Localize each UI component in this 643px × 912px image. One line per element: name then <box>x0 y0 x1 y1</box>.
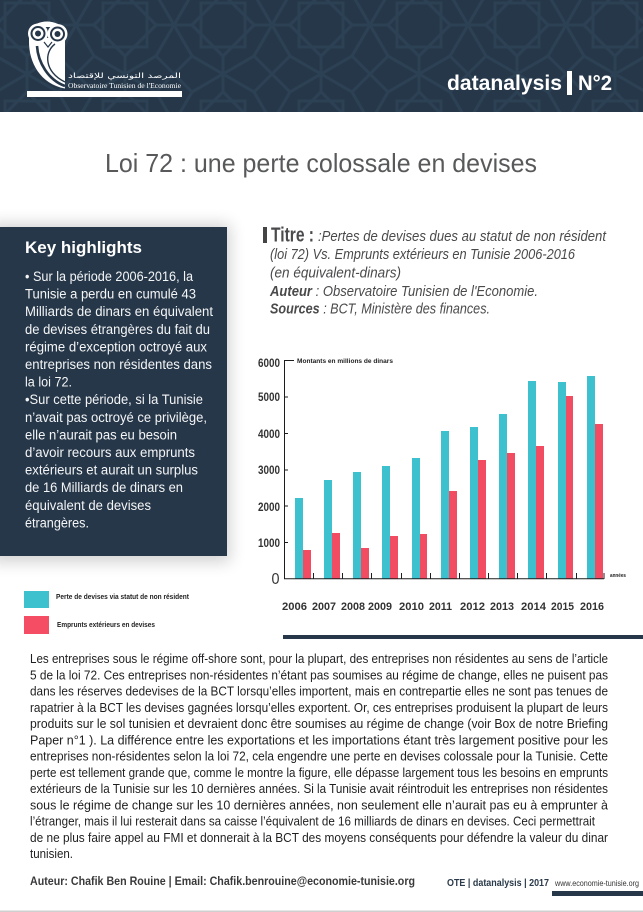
legend <box>24 591 190 634</box>
body text <box>30 651 609 861</box>
key highlights text: Milliards de dinars en équivalent <box>25 304 213 319</box>
y axis labels: 2000 <box>258 502 280 514</box>
chart description: (loi 72) Vs. Emprunts extérieurs en Tunisie 2006-2016 <box>270 247 576 263</box>
x axis labels: 2013 <box>490 601 514 613</box>
key highlights text: d’avoir recours aux emprunts <box>25 445 195 460</box>
legend item: emprunts: Emprunts extérieurs en devises <box>57 622 155 629</box>
title: Loi 72 : une perte colossale en devises <box>105 148 537 178</box>
key highlights text: équivalent de devises <box>25 498 151 513</box>
y axis labels: 1000 <box>258 538 280 550</box>
chart description: Auteur : Observatoire Tunisien de l'Economie. <box>269 284 538 300</box>
logo underline bar <box>27 91 182 97</box>
footer author and email: Auteur: Chafik Ben Rouine | Email: Chafik.benrouine@economie-tunisie.org <box>30 876 415 888</box>
header label: datanalysis <box>447 72 562 95</box>
x axis labels: 2014 <box>521 601 547 613</box>
header label: N°2 <box>578 72 612 95</box>
header label <box>447 71 612 95</box>
body text: produits sur le sol tunisien et devraient donc être soumises au régime de change (voir Box de notre Briefing <box>30 716 608 731</box>
footer accent bar <box>552 891 643 896</box>
key highlights text: extérieurs et aurait un surplus <box>25 463 198 478</box>
chart description: (en équivalent-dinars) <box>270 266 401 282</box>
x axis labels: 2015 <box>551 601 574 613</box>
y axis labels: 6000 <box>258 358 280 370</box>
x axis labels: 2016 <box>580 601 604 613</box>
y axis title: Montants en millions de dinars <box>297 358 393 365</box>
key highlights text: régime d’exception octroyé aux <box>25 339 207 354</box>
icon: owl logo <box>28 22 68 88</box>
y axis labels <box>258 358 280 588</box>
chart description: Sources : BCT, Ministère des finances. <box>270 302 490 318</box>
x axis labels: 2010 <box>399 601 424 613</box>
key highlights text: de 16 Milliards de dinars en <box>25 480 183 495</box>
footer bottom line <box>0 910 643 912</box>
legend item: emprunts <box>24 616 155 634</box>
x axis labels: 2006 <box>282 601 307 613</box>
legend item: perte de devises <box>24 591 190 608</box>
panel: key highlights <box>0 224 230 562</box>
x axis title: années <box>610 573 626 579</box>
key highlights text: entreprises non résidentes dans <box>25 357 212 372</box>
x axis labels <box>282 601 604 613</box>
key highlights text: Tunisie a perdu en cumulé 43 <box>25 287 196 302</box>
footer <box>0 876 643 912</box>
x axis labels: 2009 <box>368 601 392 613</box>
body text: sous le régime de change sur les 10 dernières années, non seulement elle n’aurait pas eu à emprunter à <box>30 797 609 812</box>
key highlights text: étrangères. <box>25 515 89 530</box>
y axis labels: 0 <box>272 571 280 588</box>
chart description: Titre : <box>271 224 314 246</box>
key highlights text: elle n’aurait pas eu besoin <box>25 427 177 442</box>
x axis labels: 2008 <box>341 601 365 613</box>
key highlights text: •Sur cette période, si la Tunisie <box>25 392 203 407</box>
chart description: :Pertes de devises dues au statut de non résident <box>318 229 607 245</box>
x axis labels: 2012 <box>460 601 485 613</box>
x axis labels: 2007 <box>312 601 336 613</box>
key highlights text: n’avait pas octroyé ce privilège, <box>25 410 207 425</box>
chart axes <box>284 360 604 579</box>
series: emprunts extérieurs <box>303 396 603 579</box>
body text: tunisien. <box>30 846 73 861</box>
key highlights text: de devises étrangères du fait du <box>25 322 210 337</box>
header banner <box>0 0 643 112</box>
logo arabic name: المرصد التونسي للإقتصاد <box>68 71 181 80</box>
y axis labels: 5000 <box>258 392 280 404</box>
divider bar under chart <box>283 635 643 639</box>
bar chart <box>258 358 626 613</box>
key highlights text: • Sur la période 2006-2016, la <box>25 269 193 284</box>
body text: Paper n°1 ). La différence entre les exportations et les importations étant très largement positive pour les <box>30 732 608 747</box>
key highlights text <box>25 269 213 530</box>
series: perte de devises <box>295 376 595 579</box>
legend item: perte de devises: Perte de devises via statut de non résident <box>56 594 190 601</box>
x axis labels: 2011 <box>429 601 452 613</box>
y axis labels: 3000 <box>258 465 280 477</box>
key highlights heading: Key highlights <box>25 238 142 257</box>
logo french name: Observatoire Tunisien de l'Economie <box>68 81 182 90</box>
y axis labels: 4000 <box>258 429 280 441</box>
chart description <box>263 224 607 318</box>
footer publication label: OTE | datanalysis | 2017 <box>447 877 549 889</box>
key highlights text: la loi 72. <box>25 375 72 390</box>
